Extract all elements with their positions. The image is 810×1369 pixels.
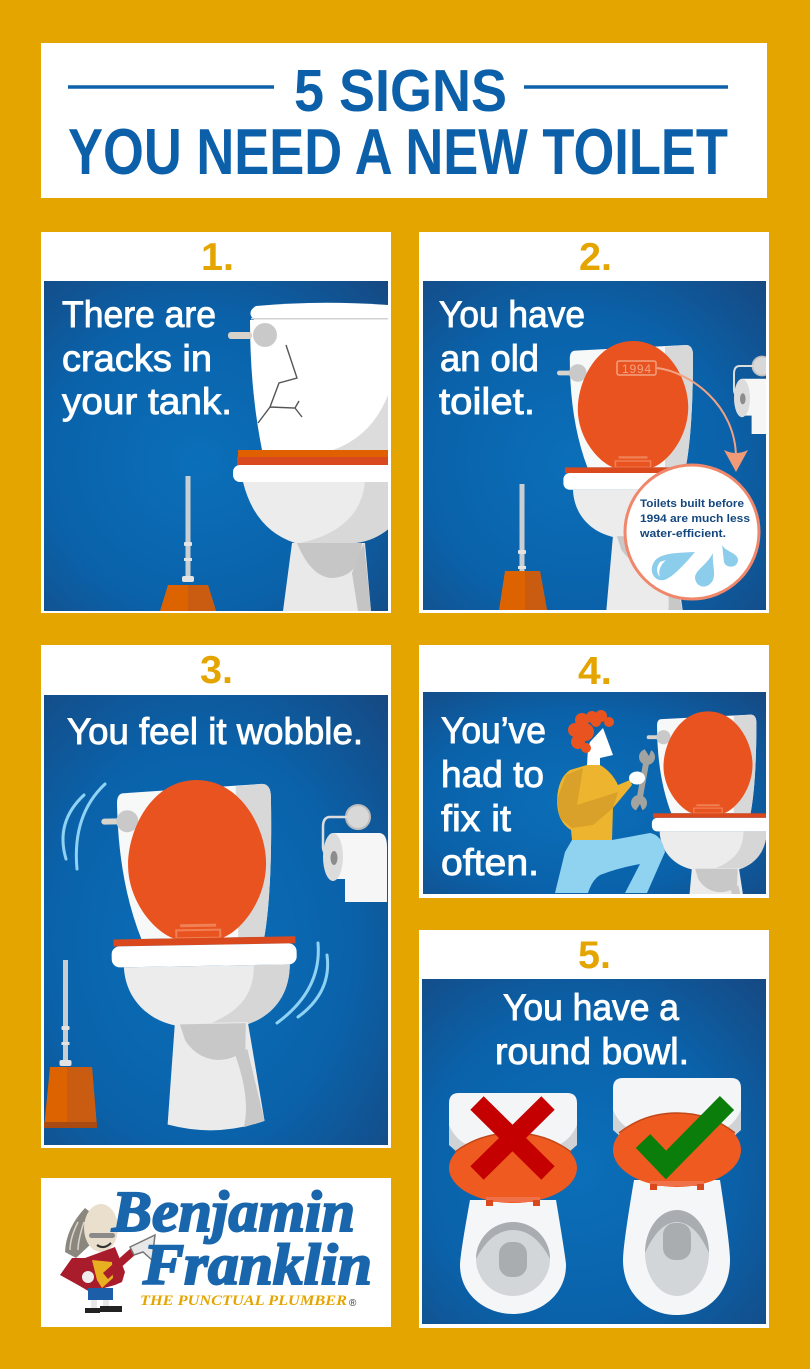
panel 5: round bowl bbox=[419, 930, 769, 1328]
panel 5 text: round bowl. bbox=[495, 1031, 689, 1072]
panel 4 text: had to bbox=[441, 754, 544, 795]
toilet paper roll bbox=[323, 805, 387, 902]
panel 1 text bbox=[62, 294, 232, 422]
panel 4 text: fix it bbox=[441, 798, 512, 839]
callout circle: 1994 are much less bbox=[640, 513, 750, 525]
toilet bbox=[101, 778, 300, 1132]
panel 2 text bbox=[439, 294, 585, 422]
panel 1 text: your tank. bbox=[62, 381, 232, 422]
panel 1 text: There are bbox=[62, 294, 216, 335]
title banner bbox=[41, 43, 767, 198]
logo tagline: THE PUNCTUAL PLUMBER bbox=[140, 1293, 347, 1309]
number 4: 4. bbox=[578, 650, 612, 693]
panel 1: cracks in tank bbox=[41, 232, 398, 613]
round toilet with red X bbox=[449, 1093, 577, 1314]
panel 3: wobble bbox=[41, 645, 391, 1148]
callout circle bbox=[625, 465, 759, 599]
logo wordmark: Benjamin bbox=[111, 1179, 355, 1244]
registered mark: ® bbox=[349, 1298, 357, 1309]
logo wordmark: Franklin bbox=[142, 1232, 372, 1297]
mascot bbox=[60, 1204, 155, 1313]
panel 4: fixed often bbox=[419, 645, 769, 898]
year badge bbox=[617, 361, 656, 376]
number 3: 3. bbox=[200, 649, 233, 692]
toilet brush bbox=[499, 484, 547, 610]
curved arrow bbox=[657, 368, 748, 472]
toilet paper roll bbox=[733, 356, 766, 434]
panel 5 text bbox=[495, 987, 689, 1072]
panel 2 text: You have bbox=[439, 294, 585, 335]
callout circle: Toilets built before bbox=[640, 498, 744, 510]
panel 5 text: You have a bbox=[503, 987, 679, 1028]
toilet close-up with cracked tank bbox=[228, 303, 398, 611]
toilet bbox=[646, 711, 766, 894]
number 1: 1. bbox=[201, 236, 234, 279]
toilet brush bbox=[44, 960, 97, 1128]
number 5: 5. bbox=[578, 934, 611, 977]
panel 1 text: cracks in bbox=[62, 338, 212, 379]
toilet brush bbox=[160, 476, 216, 611]
water drops bbox=[652, 545, 738, 587]
callout circle: water-efficient. bbox=[639, 528, 726, 540]
title line 1: 5 SIGNS bbox=[294, 58, 507, 124]
logo wordmark bbox=[111, 1179, 372, 1297]
logo panel bbox=[41, 1178, 391, 1327]
toilet bbox=[557, 341, 693, 610]
panel 2 text: toilet. bbox=[439, 381, 535, 422]
panel 2 text: an old bbox=[440, 338, 539, 379]
wobble motion lines left bbox=[63, 784, 105, 869]
elongated toilet with green check bbox=[613, 1078, 741, 1315]
panel 4 text bbox=[441, 710, 546, 883]
panel 3 text: You feel it wobble. bbox=[67, 711, 363, 752]
wobble motion lines right bbox=[277, 943, 328, 1023]
year badge: 1994 bbox=[622, 362, 651, 376]
panel 4 text: often. bbox=[441, 842, 539, 883]
panel 4 text: You’ve bbox=[441, 710, 546, 751]
panel 2: old toilet bbox=[419, 232, 785, 621]
person with wrench bbox=[555, 710, 665, 893]
number 2: 2. bbox=[579, 236, 612, 279]
